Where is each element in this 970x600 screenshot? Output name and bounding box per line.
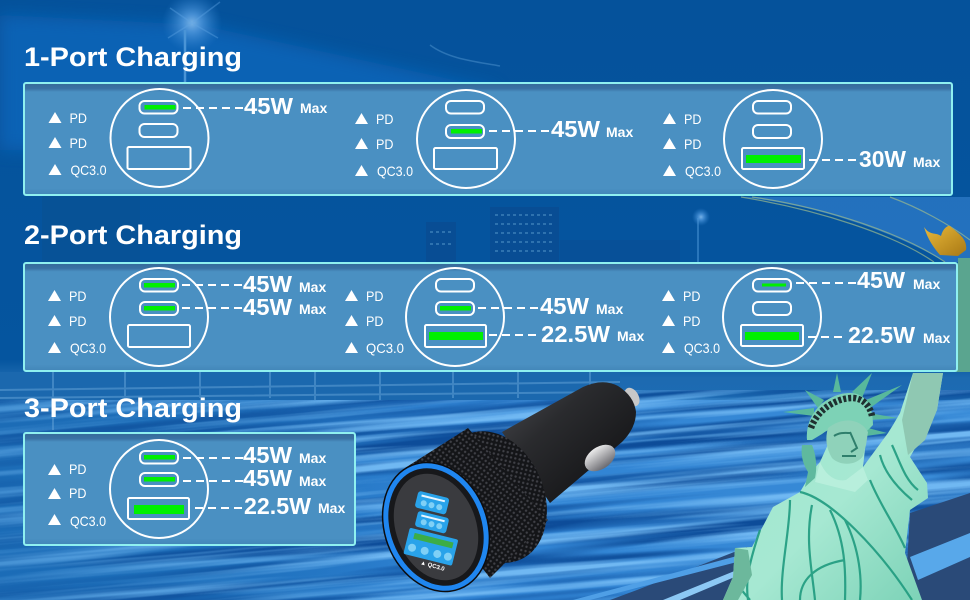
car charger product <box>363 382 643 600</box>
diagram: all three ports: 22.5W <box>244 493 311 519</box>
diagram: all three ports: PD <box>69 461 86 477</box>
diagram: QC3.0 port at 30W: PD <box>684 136 702 152</box>
diagram: port 2 at 45W <box>355 90 633 188</box>
diagram: port 2 at 45W: QC3.0 <box>377 163 413 179</box>
diagram: QC3.0 port at 30W: PD <box>684 111 702 127</box>
diagram: all three ports: QC3.0 <box>70 513 106 529</box>
diagram: port 2 at 45W: PD <box>376 111 394 127</box>
diagram: both PD ports at 45W: PD <box>69 313 86 329</box>
diagram: all three ports: Max <box>318 500 345 516</box>
diagram: QC3.0 port at 30W: 30W <box>859 146 906 172</box>
diagram: all three ports: Max <box>299 450 326 466</box>
diagram: top PD 45W plus QC3.0 22.5W: 45W <box>857 267 905 293</box>
panel: 2-port charging <box>24 263 957 371</box>
diagram: top PD 45W plus QC3.0 22.5W <box>662 267 950 366</box>
diagram: both PD ports at 45W: 45W <box>243 271 292 297</box>
diagram: port 2 at 45W: PD <box>376 136 394 152</box>
diagram: port 2 at 45W: Max <box>606 124 633 140</box>
diagram: QC3.0 port at 30W: QC3.0 <box>685 163 721 179</box>
diagram: PD 45W plus QC3.0 22.5W: 45W <box>540 293 589 319</box>
diagram: PD 45W plus QC3.0 22.5W: Max <box>617 328 644 344</box>
diagram: top PD 45W plus QC3.0 22.5W: 22.5W <box>848 322 915 348</box>
diagram: port 1 at 45W <box>48 89 327 187</box>
diagram: both PD ports at 45W: PD <box>69 288 86 304</box>
diagram: PD 45W plus QC3.0 22.5W: PD <box>366 288 384 304</box>
diagram: top PD 45W plus QC3.0 22.5W: QC3.0 <box>684 340 720 356</box>
diagram: all three ports: 45W <box>243 442 292 468</box>
diagram: top PD 45W plus QC3.0 22.5W: PD <box>683 288 700 304</box>
diagram: top PD 45W plus QC3.0 22.5W: PD <box>683 313 700 329</box>
diagram: both PD ports at 45W: 45W <box>243 294 292 320</box>
Statue of Liberty with torch <box>723 226 970 600</box>
diagram: port 2 at 45W: 45W <box>551 116 600 142</box>
heading: 3-Port Charging: 3-Port Charging <box>24 393 242 423</box>
panel: 3-port charging <box>24 433 355 545</box>
diagram: all three ports: Max <box>299 473 326 489</box>
diagram: port 1 at 45W: PD <box>70 110 87 126</box>
diagram: port 1 at 45W: 45W <box>244 93 293 119</box>
panel: 1-port charging <box>24 83 952 195</box>
diagram: port 1 at 45W: PD <box>70 135 87 151</box>
diagram: top PD 45W plus QC3.0 22.5W: Max <box>913 276 940 292</box>
diagram: port 1 at 45W: QC3.0 <box>70 162 107 178</box>
diagram: QC3.0 port at 30W <box>663 90 940 188</box>
diagram: all three ports <box>48 440 345 538</box>
heading: 2-Port Charging: 2-Port Charging <box>24 220 242 250</box>
USB-C port 1 <box>415 491 450 515</box>
diagram: both PD ports at 45W <box>48 268 326 366</box>
USB-A QC3.0 port <box>403 528 458 566</box>
diagram: PD 45W plus QC3.0 22.5W: 22.5W <box>541 321 610 347</box>
diagram: PD 45W plus QC3.0 22.5W: QC3.0 <box>366 340 404 356</box>
diagram: PD 45W plus QC3.0 22.5W <box>345 268 644 366</box>
heading: 1-Port Charging: 1-Port Charging <box>24 42 242 72</box>
diagram: PD 45W plus QC3.0 22.5W: PD <box>366 313 384 329</box>
diagram: QC3.0 port at 30W: Max <box>913 154 940 170</box>
diagram: all three ports: 45W <box>243 465 292 491</box>
diagram: all three ports: PD <box>69 485 86 501</box>
diagram: both PD ports at 45W: Max <box>299 279 326 295</box>
diagram: port 1 at 45W: Max <box>300 100 327 116</box>
diagram: PD 45W plus QC3.0 22.5W: Max <box>596 301 623 317</box>
diagram: both PD ports at 45W: QC3.0 <box>70 340 106 356</box>
port marking: ▲ QC3.0 <box>419 560 446 573</box>
USB-C port 2 <box>415 511 449 534</box>
diagram: top PD 45W plus QC3.0 22.5W: Max <box>923 330 950 346</box>
diagram: both PD ports at 45W: Max <box>299 301 326 317</box>
